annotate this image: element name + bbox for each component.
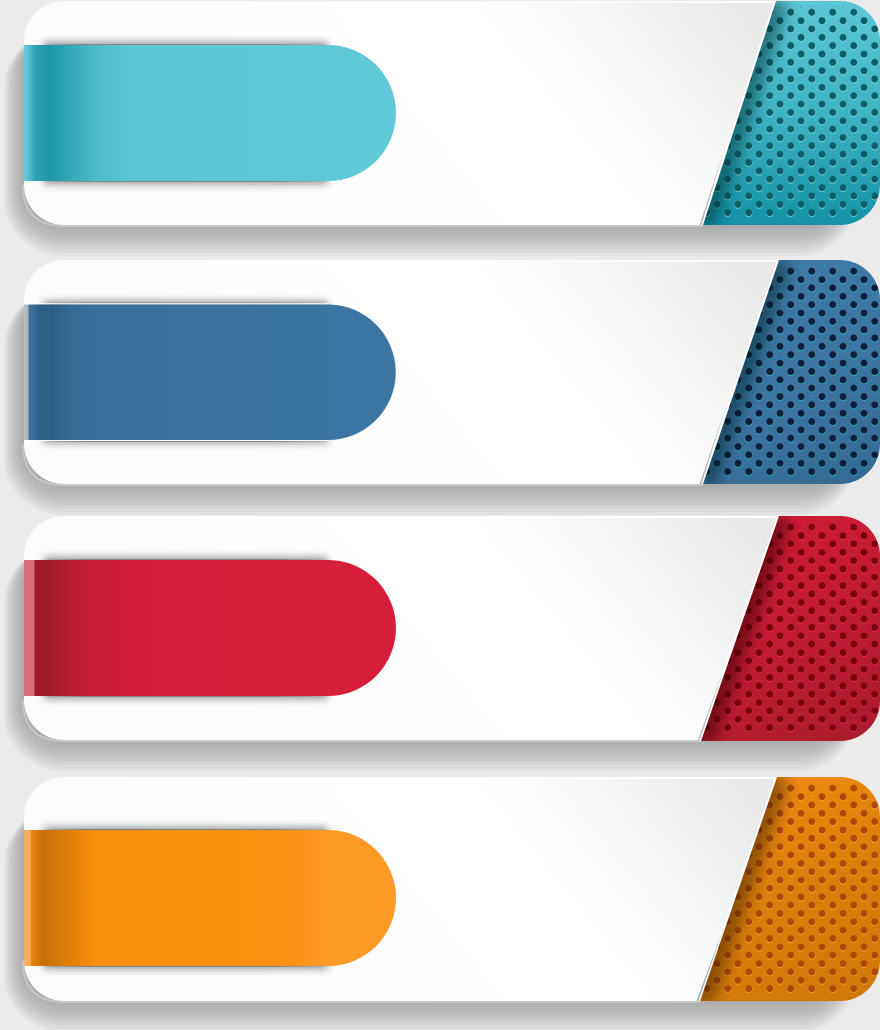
ribbon: red [24,560,396,696]
perforated panel: teal [695,1,880,227]
ribbon: orange [24,830,396,966]
ribbon: blue [24,304,396,440]
ribbon: teal [24,45,396,181]
perforated panel: blue [695,260,880,486]
perforated panel: orange [695,777,880,1003]
panel: orange banner [4,777,880,1030]
panel: blue banner [4,260,880,515]
perforated panel: red [695,516,880,742]
panel: red banner [4,516,880,771]
panel: teal banner [4,1,880,256]
